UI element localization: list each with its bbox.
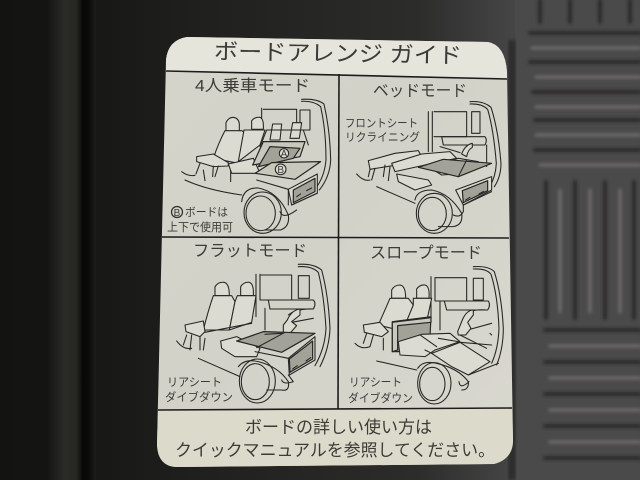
panel: 4-seat mode	[167, 77, 331, 234]
panel: flat mode	[165, 243, 330, 404]
panel: slope mode	[348, 244, 503, 405]
label: front seat reclining: リクライニング	[345, 130, 420, 144]
label: rear seat dive down: リアシート	[167, 377, 222, 389]
footer note	[175, 417, 495, 460]
label: rear seat dive down: リアシート	[349, 377, 402, 389]
heading: 4-seat mode: 4人乗車モード	[195, 77, 310, 95]
label: rear seat dive down	[165, 377, 233, 404]
illustration: bed mode	[357, 102, 501, 233]
title: ボードアレンジ ガイド	[214, 39, 462, 68]
footer note: クイックマニュアルを参照してください。	[175, 441, 495, 460]
panel: bed mode	[345, 83, 501, 233]
label: rear seat dive down	[348, 377, 413, 405]
note: board B usable up or down: ボードは	[185, 206, 228, 219]
label: rear seat dive down: ダイブダウン	[348, 391, 413, 405]
illustration: slope mode	[355, 267, 503, 404]
illustration: flat mode	[177, 264, 330, 403]
label: rear seat dive down: ダイブダウン	[165, 390, 233, 404]
illustration: 4-seat mode: A	[281, 149, 288, 160]
heading: slope mode: スロープモード	[370, 244, 482, 262]
footer note: ボードの詳しい使い方は	[245, 417, 432, 437]
heading: flat mode: フラットモード	[193, 243, 307, 260]
label: front seat reclining	[345, 118, 420, 144]
note: board B usable up or down	[167, 206, 233, 234]
note: board B usable up or down: B	[174, 208, 181, 219]
note: board B usable up or down: 上下で使用可	[167, 220, 233, 234]
label: front seat reclining: フロントシート	[345, 118, 418, 130]
illustration: 4-seat mode: B	[277, 165, 284, 176]
guide sticker panel	[157, 37, 513, 467]
illustration: 4-seat mode	[182, 99, 331, 233]
heading: bed mode: ベッドモード	[373, 83, 467, 100]
